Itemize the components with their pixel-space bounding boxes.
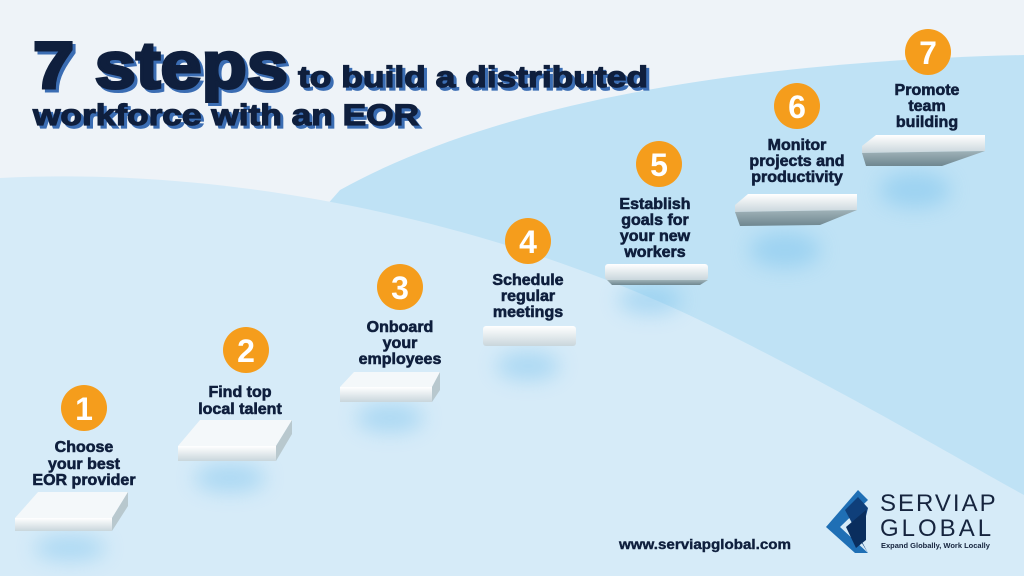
step 1: 1 [75,391,93,427]
title: workforce with an EOR [35,102,422,135]
title [32,28,651,135]
step 7 [862,29,985,166]
title: to build a distributed [298,61,648,94]
step 4: Schedule [492,272,564,289]
step 7: team [908,98,946,115]
step 3: your [383,335,417,352]
logo: Expand Globally, Work Locally [881,541,991,550]
step 5: Establish [619,196,691,213]
step 5: 5 [650,147,668,183]
step 5: your new [620,228,691,245]
step 6: 6 [788,89,806,125]
step 6 [735,83,857,226]
step 7: building [896,114,958,131]
logo: SERVIAP [880,490,998,517]
step 4 [483,218,576,346]
step 6: Monitor [768,137,826,154]
step 1 [15,385,136,531]
step 1: Choose [55,439,113,456]
step 5: workers [623,244,686,261]
shadows [34,172,951,560]
step 3: Onboard [367,319,433,336]
step 4: regular [501,288,555,305]
step 3: 3 [391,270,409,306]
step 6: projects and [749,153,845,170]
step 1: EOR provider [32,472,136,489]
title: 7 steps [36,31,291,105]
step 5: goals for [621,212,689,229]
step 2: local talent [198,401,282,418]
logo: GLOBAL [880,515,994,542]
step 6: productivity [751,169,843,186]
step 4: 4 [519,224,537,260]
step 7: Promote [895,82,960,99]
step 2 [178,327,292,461]
title: 7 steps [33,28,288,102]
title: workforce with an EOR [32,99,419,132]
step 7: 7 [919,35,937,71]
step 2: Find top [208,384,272,401]
step 4: meetings [493,304,563,321]
step 3: employees [359,351,441,368]
step 3 [340,264,441,402]
step 1: your best [48,456,121,473]
website url: www.serviapglobal.com [618,536,791,552]
logo [826,490,998,553]
step 5 [605,141,708,285]
step 2: 2 [237,333,255,369]
title: to build a distributed [301,64,651,97]
